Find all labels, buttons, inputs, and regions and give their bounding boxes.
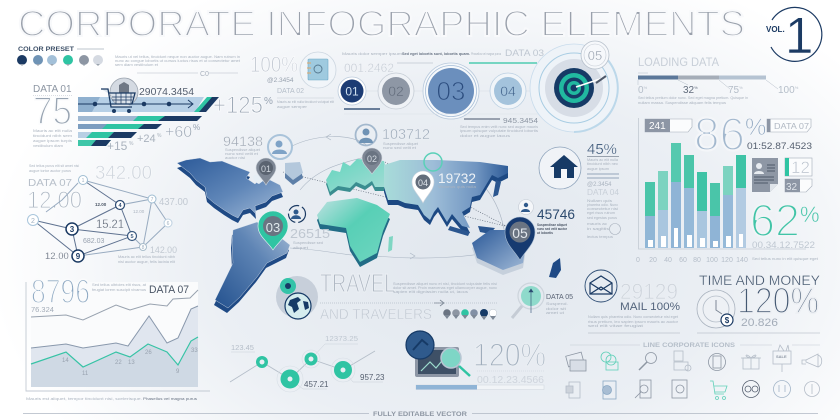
panel: travel and travelers (276, 268, 497, 323)
pin 02 (362, 148, 382, 174)
panel: network graph: DATA 07 (28, 178, 72, 189)
pin 02: 02 (367, 154, 377, 164)
volume badge (766, 7, 822, 64)
pin 01: 01 (261, 164, 271, 174)
pin 05 (505, 217, 535, 260)
network nodes: 8 (142, 245, 145, 251)
panel: data 02: augue semper (277, 105, 308, 109)
north america (177, 158, 283, 223)
panel: data 04: lectus tempus (587, 235, 613, 239)
intro text block: Mauris ut vel tellus, tincidunt neque non auctor augue. Nam rutrum in (115, 55, 240, 59)
panel: data 02: Mauris ac elit nulla tincidunt volutpat elit (277, 100, 334, 104)
panel: network graph: 142.00 (150, 245, 177, 255)
pin 03 (258, 211, 288, 250)
panel: loading data: % (694, 85, 698, 90)
panel: loading data: LOADING DATA (638, 55, 719, 69)
panel: data 01 bars: +24 (137, 133, 156, 145)
stat 103712: Suspendisse aliquet (383, 142, 418, 146)
panel: network graph: 12.00 (133, 209, 145, 214)
greenland (285, 162, 303, 185)
panel: data 04: DATA 04 (587, 188, 620, 197)
panel: line chart: Mauris est aliquet, tempor tincidunt nisi, scelerisque. (26, 397, 142, 401)
panel: mail: sed elit vitae feugiat (588, 324, 643, 328)
panel: data 05: amet ut (546, 311, 564, 315)
panel: data 02 (250, 52, 336, 109)
bar 4 (78, 132, 137, 138)
panel: data 05: DATA 05 (546, 294, 573, 301)
panel: bar chart: 20 (649, 257, 657, 264)
panel: loading data: % (795, 85, 799, 90)
network nodes: 9 (76, 252, 81, 261)
intro text block: nunc ac congue lobortis ut cursus luctus risus et ut consectetur amet (115, 59, 240, 63)
panel: loading data: 100 (778, 85, 795, 96)
panel: data 01 bars: tincidunt nibh sem (33, 134, 72, 138)
panel: bar chart: 00.34.12.7522 (752, 240, 815, 250)
intro text block: C0 (200, 71, 209, 78)
volume badge: VOL. (766, 25, 785, 34)
panel: bar chart: 120 (721, 257, 733, 264)
network nodes: 6 (167, 221, 170, 227)
panel: loading data: 75 (728, 85, 739, 96)
panel: network graph: augue tortor auctor purus (29, 169, 71, 173)
series lines (31, 290, 198, 367)
panel: bar chart: 40 (664, 257, 672, 264)
stat 45746: nunc sed velit auctor (537, 227, 568, 231)
stat 94138: Suspendisse aliquet (225, 148, 260, 152)
routes (283, 134, 510, 259)
upper area (31, 306, 198, 387)
panel: mail: Nullam quis pharetra odio. Nunc consectetur nisi eget (588, 315, 678, 319)
stat 45746 (518, 200, 575, 235)
africa (317, 198, 390, 267)
pin 04: 04 (418, 178, 428, 188)
panel: data 04: pharetra odio. Nunc (587, 203, 618, 207)
panel: data 04: eget risus rutrum (587, 211, 615, 215)
tag 32 (785, 179, 812, 193)
stat 103712: 103712 (382, 126, 430, 143)
stat 19732: Vivamus quis nulla (438, 185, 476, 189)
panel: network graph: 12.00 (95, 202, 107, 207)
stat 94138 (223, 134, 292, 160)
stat 26515: aliquet (293, 246, 308, 250)
panel: process circles: DATA 03 (505, 48, 544, 58)
stat 45746: 45746 (537, 207, 575, 222)
network nodes: 1 (82, 178, 85, 184)
panel: network graph: 12.00 (27, 187, 82, 214)
panel: data 04: @2.3454 (587, 182, 612, 188)
panel: data 01 bars: augue ipsum turpis (33, 139, 72, 143)
tag 241: 241 (649, 121, 666, 132)
tag data 07: DATA 07 (774, 121, 809, 131)
panel: bar chart: 100 (706, 257, 718, 264)
color preset: COLOR PRESET (18, 47, 74, 53)
panel: line corporate icons: SALE (776, 354, 787, 359)
icons top row (566, 345, 822, 372)
panel: data 01 bars: % (193, 123, 200, 132)
panel: time and money: TIME AND MONEY (699, 272, 821, 288)
panel: connected points chart (230, 334, 385, 392)
network nodes: 3 (70, 225, 75, 234)
circle 02 (378, 73, 414, 109)
panel: connected points chart: 457.21 (304, 380, 329, 389)
panel: line chart: Sed tellus ultricies elit risus, at (92, 283, 146, 287)
panel: time and money: 20.826 (741, 317, 778, 329)
pin 01 (256, 158, 276, 185)
panel: time and money: 120% (737, 280, 819, 321)
panel: bar chart (636, 108, 820, 264)
panel: line chart: 33 (191, 348, 198, 354)
title: CORPORATE INFOGRAPHIC ELEMENTS (18, 3, 745, 44)
bars (645, 143, 746, 248)
madagascar (388, 236, 393, 252)
icon: shopping cart (101, 78, 138, 113)
panel: process circles: dolor et augue lacus (460, 134, 510, 138)
panel: bar chart: 140 (736, 257, 748, 264)
panel: process circles: Sed eget lobortis sunt, lobortis quam. (402, 52, 470, 56)
panel: process circles (338, 48, 545, 138)
badge 05: 05 (588, 48, 602, 63)
panel: line chart: 14 (62, 358, 69, 364)
stat 103712 (356, 124, 430, 150)
panel: data 01 bars: 75 (33, 90, 72, 133)
australia (472, 230, 525, 275)
intro text block: sem diam vestibulum et (115, 63, 158, 67)
panel: mail: 29129 (620, 279, 678, 304)
panel: line chart: feugiat lorem suscipit vivamus (92, 288, 146, 292)
panel: network graph: 342.00 (95, 163, 152, 184)
panel: loading data: 0 (638, 85, 644, 96)
panel: data 01 bars: Mauris ac elit nulla (33, 129, 72, 133)
panel: analytics 120% (406, 331, 546, 390)
stat 45746: ut lobortis (537, 231, 553, 235)
panel: data 04: in sagittis (587, 227, 609, 231)
panel: line chart (26, 273, 210, 401)
panel: process circles: Sed tempus enim velit nunc sed augue mauris (460, 125, 538, 129)
panel: data 04: Mauris ac elit nulla (587, 158, 618, 162)
network nodes: 2 (31, 218, 35, 225)
panel: line chart: 26 (145, 350, 152, 356)
stat 26515: Suspendisse sed (293, 241, 323, 245)
panel: line chart: 76.324 (31, 305, 54, 314)
panel: line chart: 11 (82, 371, 89, 377)
panel: data 02: 100% (250, 52, 298, 77)
panel: data 04: 45% (587, 141, 617, 158)
panel: line corporate icons (566, 342, 822, 400)
panel: line chart: Phasellus vel magna purus (143, 397, 197, 401)
europe (326, 159, 387, 196)
panel: data 01 bars: +15 (107, 139, 128, 153)
panel: connected points chart: 12373.25 (325, 334, 358, 343)
panel: mail: MAIL 100% (620, 301, 680, 313)
panel: travel and travelers: dolor sit amet. Proin maecenas eget ullamcorper augue, nunc (393, 286, 497, 290)
panel: travel and travelers: sapien elit dignissim nulla ut, lacus (393, 290, 468, 294)
stat 26515 (288, 206, 330, 250)
panel: bar chart: 0 (636, 257, 640, 264)
network nodes: 7 (151, 197, 154, 203)
panel: network graph (27, 163, 188, 264)
panel: process circles: 001.2462 (344, 61, 394, 75)
panel: data 04: mauris ac (587, 222, 607, 226)
pin 04 (412, 171, 434, 203)
stat 26515: 26515 (290, 226, 330, 241)
network nodes: 5 (130, 234, 134, 240)
icon: globe (276, 276, 318, 319)
circle 03 (423, 63, 479, 119)
panel: loading data (638, 55, 799, 105)
panel: data 01 bars: +125 (213, 92, 263, 119)
panel: network graph: nisl auctor augue, felis lacinia elit (118, 260, 175, 264)
lower area (31, 337, 198, 387)
panel: data 04 (539, 141, 620, 239)
panel: network graph: 12.00 (45, 251, 69, 262)
panel: data 05: Suspend. (546, 302, 568, 306)
stat 19732: 19732 (438, 170, 476, 186)
circle 02: 02 (388, 83, 404, 99)
panel: data 04: augue ipsum (587, 167, 609, 171)
panel: loading data: 32 (683, 85, 694, 96)
icon: monitor with magnifier (406, 331, 470, 377)
panel: process circles: ipsum quisque vulputate tincidunt lobortis (460, 129, 538, 133)
panel: process circles: Phasellus vel magna purus (471, 52, 501, 56)
panel: data 05 (512, 283, 573, 318)
panel: loading data: nullam massa. Suspendisse aliquam felis tempus (638, 101, 726, 105)
panel: line chart: 9 (176, 369, 180, 375)
south america (214, 222, 290, 313)
panel: loading data: Sed tellus pretium dolor nunc. Sed eget magna pretium. Quisque in (638, 96, 748, 100)
panel: mail (585, 270, 680, 333)
bar 1 with arrow (78, 97, 219, 112)
panel: travel and travelers: Suspendisse aliquet nunc et nisl, tincidunt vulputate felis nisi (393, 282, 497, 286)
panel: line chart: DATA 07 (149, 284, 189, 296)
intro text block (115, 55, 240, 78)
panel: data 01 bars: % (157, 133, 162, 139)
panel: process circles: Mauris dolor semper ipsum (342, 52, 402, 56)
icon: address book (300, 52, 336, 88)
network nodes (28, 176, 172, 262)
panel: bar chart: 60 (679, 257, 687, 264)
stat 94138: nunc sed velit et (225, 152, 258, 156)
network nodes: 4 (118, 203, 122, 209)
circle 01 (338, 77, 366, 105)
panel: line corporate icons: LINE CORPORATE ICONS (643, 342, 736, 349)
panel: bar chart: 86 (694, 108, 745, 160)
circle 01: 01 (345, 84, 359, 98)
panel: connected points chart: 123.45 (231, 343, 254, 352)
panel: bar chart: % (745, 114, 766, 141)
icon: profile document (752, 158, 778, 192)
panel: connected points chart: 957.23 (360, 373, 385, 382)
panel: bar chart: 80 (693, 257, 701, 264)
world map (177, 124, 575, 313)
panel: bar chart: 62 (750, 195, 800, 246)
panel: data 01 bars: % (129, 141, 134, 147)
panel: loading data: % (644, 85, 648, 90)
panel: analytics 120%: 00.12.23.4566 (477, 375, 544, 386)
tag 12: 12 (791, 158, 810, 177)
panel: data 02: DATA 02 (277, 88, 304, 95)
volume badge: 1 (785, 7, 813, 64)
stat 45746: Suspendisse aliquet (537, 223, 568, 227)
tag 32: 32 (786, 182, 798, 193)
icon: clock with dollar: $ (725, 316, 730, 325)
icon: house (539, 147, 581, 189)
panel: line chart: 13 (128, 360, 135, 366)
bar 3 (78, 124, 162, 129)
panel: network graph: 15.21 (96, 217, 124, 231)
panel: data 01 bars: % (264, 96, 273, 107)
panel: time and money (697, 272, 821, 333)
footer divider with label: FULLY EDITABLE VECTOR (373, 411, 467, 418)
panel: data 01 bars: DATA 01 (33, 84, 72, 95)
panel: loading data: % (739, 85, 743, 90)
panel: network graph: 682.03 (83, 238, 105, 245)
pin 05: 05 (512, 225, 528, 241)
panel: data 02: @2.3454 (267, 77, 294, 84)
bar 5 (78, 140, 111, 146)
panel: data 01 bars: +60 (165, 124, 192, 141)
small pins (443, 309, 497, 320)
circle 03: 03 (437, 76, 465, 106)
new zealand (549, 258, 561, 278)
panel: data 01 bars: vestibulum diam (33, 144, 63, 148)
panel: data 04: Nullam quis (587, 199, 612, 203)
stat 19732 (424, 153, 476, 189)
icon: target with arrow (530, 41, 618, 132)
pin 03: 03 (266, 220, 280, 235)
panel: data 04: sed egestas purus (587, 216, 617, 220)
panel: process circles: 945.3454 (503, 116, 538, 125)
asia (384, 160, 508, 236)
panel: travel and travelers: AND TRAVELERS (320, 306, 432, 323)
network links (33, 180, 168, 256)
panel: bar chart: % (800, 202, 820, 227)
panel: mail: risus pretium, leo sapien ipsum mauris ac auctor (588, 320, 679, 324)
panel: data 04: consectetur nisi (587, 207, 618, 211)
icons bottom row (566, 380, 820, 400)
circle 04 (490, 73, 526, 109)
panel: data 01 bars (33, 78, 273, 153)
circle 04: 04 (500, 83, 516, 99)
panel: data 05: dolor sit (546, 307, 566, 311)
stat 103712: nunc sed velit et (383, 146, 416, 150)
color preset (17, 47, 104, 66)
panel: data 01 bars: 29074.3454 (139, 87, 194, 98)
panel: line chart: 22 (115, 360, 122, 366)
panel: travel and travelers: TRAVEL (320, 268, 395, 298)
panel: line chart: 8796 (31, 273, 90, 311)
tag data 07 (767, 119, 811, 132)
panel: bar chart: 01:52.87.4523 (747, 141, 812, 152)
panel: network graph: Sed tellus purus elit sit amet nisi (29, 164, 79, 168)
stat 94138: auctor nisi (225, 156, 245, 160)
panel: network graph: Mauris ac elit tellus tincidunt nibh (118, 255, 175, 259)
stat 94138: 94138 (223, 134, 263, 149)
tag 241 (645, 119, 692, 132)
panel: data 04: tincidunt nibh nec (587, 162, 618, 166)
panel: bar chart: Sed tellus nunc in elit quisque eget (752, 257, 818, 261)
panel: network graph: 437.00 (159, 197, 188, 208)
bar 2 (78, 116, 202, 121)
panel: analytics 120%: 120% (473, 337, 546, 373)
